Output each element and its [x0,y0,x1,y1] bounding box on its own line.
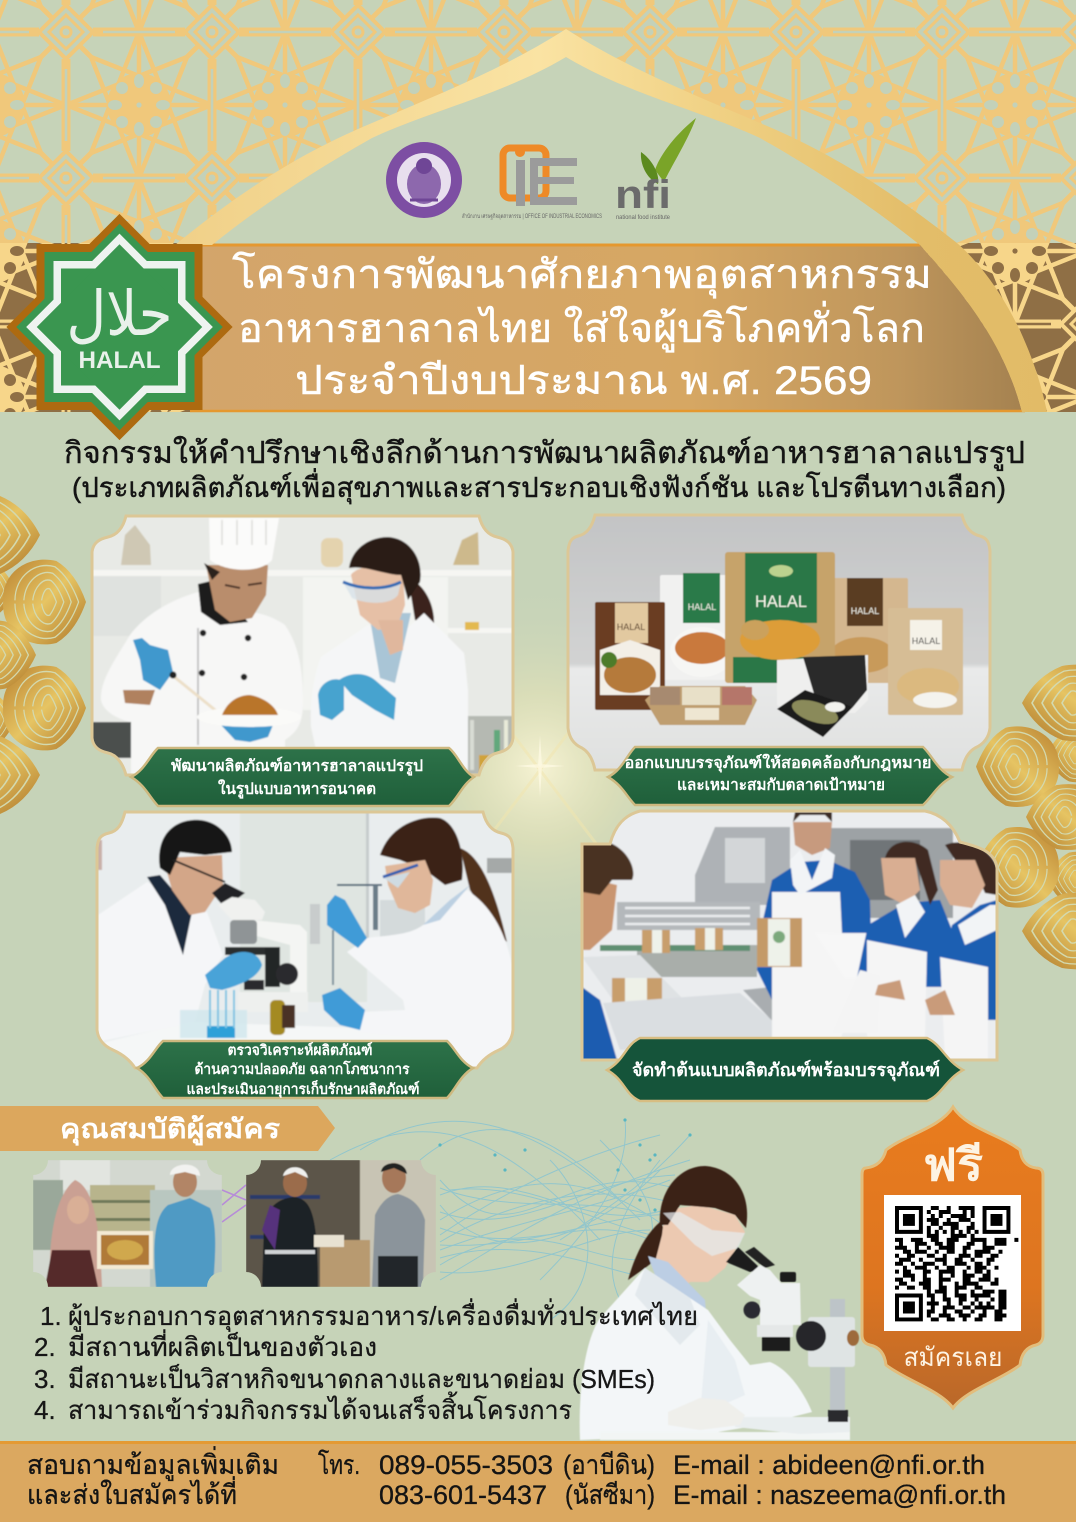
logo: ministry of industry [386,142,462,218]
chef coat [101,592,303,775]
gloves woman [327,895,367,948]
brown kraft pack [827,578,908,683]
purple connector [222,1185,246,1222]
logo: office of industrial economics [462,147,602,220]
qualifications list: มีสถานะเป็นวิสาหกิจขนาดกลางและขนาดย่อม (SMEs) [68,1363,655,1394]
conveyor [617,902,760,930]
label 3: และประเมินอายุการเก็บรักษาผลิตภัณฑ์ [186,1079,420,1098]
ponytail [628,1222,668,1280]
hair [660,1166,747,1228]
label 3 [137,1041,473,1098]
footer contact bar: และส่งใบสมัครได้ที่ [27,1476,237,1510]
kraft tray [645,686,757,725]
register free QR panel: สมัครเลย [904,1342,1002,1372]
title [232,252,932,403]
label 1 [131,748,474,806]
woman 2 [947,900,996,1021]
label 1: ในรูปแบบอาหารอนาคต [218,779,376,800]
logo: nfi [615,118,696,221]
white kraft pack [888,608,963,715]
heading: (ประเภทผลิตภัณฑ์เพื่อสุขภาพและสารประกอบเชิงฟังก์ชัน และโปรตีนทางเลือก) [72,468,1006,505]
label 2 [608,747,952,805]
label 3: ด้านความปลอดภัย ฉลากโภชนาการ [194,1060,410,1078]
mandala right [976,665,1076,969]
takeaway box [777,655,868,713]
machines [695,827,790,905]
test tube rack [180,1010,247,1038]
chef head [206,565,268,622]
qualifications list: มีสถานที่ผลิตเป็นของตัวเอง [68,1329,377,1362]
microscope [726,1247,859,1422]
panel 2: halal packaging photo [566,514,992,805]
panel 2: halal packaging photo: HALAL [617,622,645,632]
chef hat [209,518,279,570]
microscope [212,883,245,908]
footer contact bar [0,1441,1076,1522]
halal star badge [6,214,233,440]
panel 4: prototype production photo [580,810,1000,1101]
table [106,1024,426,1066]
neck and face [655,1205,745,1290]
halal arabic mark: حلال [66,277,172,350]
title: อาหารฮาลาลไทย ใส่ใจผู้บริโภคทั่วโลก [238,301,925,352]
heading: กิจกรรมให้คำปรึกษาเชิงลึกด้านการพัฒนาผลิตภัณฑ์อาหารฮาลาลแปรรูป [64,436,1025,471]
scientist with microscope [580,1166,859,1440]
counter and test tubes [94,721,132,759]
white pack [660,574,726,679]
footer contact bar: (อาบีดิน) [563,1450,655,1480]
brown pack [595,602,665,710]
shirt [648,1256,708,1335]
woman 1 [855,900,952,987]
glove man [205,952,262,990]
central glow [350,560,730,980]
label 2: ออกแบบบรรจุภัณฑ์ให้สอดคล้องกับกฎหมาย [624,753,932,773]
lattice pattern header [0,0,1076,244]
panel 2: halal packaging photo: HALAL [851,606,879,616]
footer contact bar: E-mail : naszeema@nfi.or.th [673,1480,1006,1510]
glove [668,1398,745,1430]
label 4 [607,1038,963,1101]
goggles [663,1212,745,1256]
man coat [98,882,223,1042]
panel 1: chef and scientist photo [91,515,515,806]
label 1: พัฒนาผลิตภัณฑ์อาหารฮาลาลแปรรูป [171,756,423,777]
qualifications list: สามารถเข้าร่วมกิจกรรมได้จนเสร็จสิ้นโครงการ [68,1391,572,1425]
logo: nfi: nfi [615,173,671,217]
qualifications list: 2. [34,1332,56,1362]
man head [163,855,223,915]
qualifications heading bar: คุณสมบัติผู้สมัคร [60,1114,281,1146]
photo: entrepreneurs with product tray [33,1160,222,1287]
heading [64,436,1025,505]
banner [190,245,1025,412]
shelf decor [121,525,151,565]
mandala left [0,495,86,815]
panel 3: laboratory analysis photo [90,810,515,1098]
footer contact bar: สอบถามข้อมูลเพิ่มเติม [27,1446,279,1481]
woman [460,848,507,942]
lab coat [580,1268,812,1440]
register free QR panel [862,1107,1043,1408]
left worker [582,877,617,950]
arch frame [175,29,1047,412]
photo: entrepreneurs in warehouse [246,1160,436,1287]
panel 2: halal packaging photo: HALAL [912,636,940,646]
footer contact bar: 089-055-3503 [379,1450,553,1480]
panel 2: halal packaging photo: HALAL [688,602,716,612]
dark lattice sides [0,243,1076,412]
logos [386,118,696,221]
qualifications list: 3. [34,1364,56,1394]
scientist [410,584,435,624]
glove and pipette [133,638,173,690]
qualifications list: 1. [40,1301,62,1331]
footer contact bar: (นัสซีมา) [565,1480,655,1510]
footer contact bar: E-mail : abideen@nfi.or.th [673,1450,985,1480]
QR code [895,1206,1018,1321]
logo: office of industrial economics: สำนักงาน เศรษฐกิจอุตสาหกรรม | OFFICE OF INDUSTRIAL ECONOMICS [462,213,602,220]
footer contact bar: 083-601-5437 [379,1480,547,1510]
big halal pack [725,552,835,683]
stand [337,884,382,886]
register free QR panel: ฟรี [923,1141,983,1190]
man [756,860,872,1000]
title: ประจำปีงบประมาณ พ.ศ. 2569 [295,359,872,403]
qualifications heading bar [0,1106,335,1151]
label 2: และเหมาะสมกับตลาดเป้าหมาย [677,776,885,794]
logo: nfi: national food institute [616,215,671,221]
footer contact bar: โทร. [318,1450,360,1480]
label 3: ตรวจวิเคราะห์ผลิตภัณฑ์ [228,1041,372,1059]
arch inner [212,57,920,245]
network lines [330,1118,692,1320]
panel 2: halal packaging photo: HALAL [755,592,807,611]
label 4: จัดทำต้นแบบผลิตภัณฑ์พร้อมบรรจุภัณฑ์ [632,1059,940,1082]
qualifications list: 4. [34,1395,56,1425]
qualifications list: ผู้ประกอบการอุตสาหกรรมอาหาร/เครื่องดื่มทั่วประเทศไทย [68,1298,698,1332]
qualifications list [34,1298,698,1425]
halal star badge: HALAL [78,347,160,374]
table and base [600,1432,850,1440]
title: โครงการพัฒนาศักยภาพอุตสาหกรรม [232,252,932,299]
